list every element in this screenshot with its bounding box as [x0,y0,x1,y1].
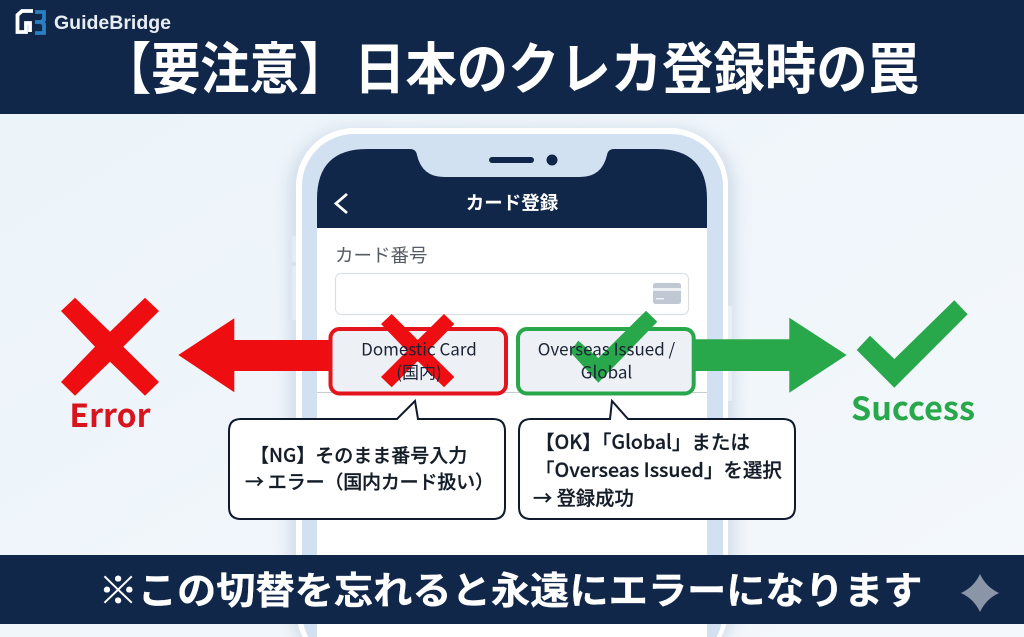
logo: GuideBridge [54,12,171,34]
screen title: カード登録 [466,190,559,216]
panel: phone mockup [288,128,736,637]
option: domestic card [330,314,506,394]
callout: NG: → エラー（国内カード扱い） [245,468,494,494]
speaker and camera [489,154,558,166]
callout: NG: 【NG】そのまま番号入力 [250,441,467,468]
option: overseas issued: Global [581,358,632,384]
callout: OK [519,401,795,519]
footer band [0,555,1024,624]
option: overseas issued: Overseas Issued / [538,336,676,360]
header band [0,0,1024,114]
field label: カード番号 [335,242,428,268]
callout: OK: 【OK】「Global」または [535,426,750,455]
icon: GB logo [18,11,44,33]
arrow: red to error [178,318,332,392]
icon: card [653,283,681,304]
card number input [336,274,688,314]
callout: OK: → 登録成功 [533,483,634,511]
icon: back chevron [336,194,347,213]
option: overseas issued [518,311,694,394]
arrow: green to success [692,318,847,393]
title: 【要注意】 [102,25,348,106]
divider line [317,392,707,393]
success label: Success [851,384,975,430]
icon: sparkle [961,574,999,612]
footer message: ※この切替を忘れると永遠にエラーになります [98,560,922,615]
title: 日本のクレカ登録時の罠 [354,25,919,106]
callout: OK: 「Overseas Issued」を選択 [535,454,782,483]
icon: red cross over option [381,314,454,387]
option: domestic card: Domestic Card [361,336,477,360]
app header bar with notch [317,149,707,228]
error label: Error [69,391,151,437]
callout: NG [229,401,505,519]
option: domestic card: (国内) [396,358,442,384]
icon: green check over option [570,311,657,383]
phone screen [317,228,707,637]
icon: big red cross [61,298,159,396]
title [102,25,919,106]
icon: big green check [857,300,968,388]
